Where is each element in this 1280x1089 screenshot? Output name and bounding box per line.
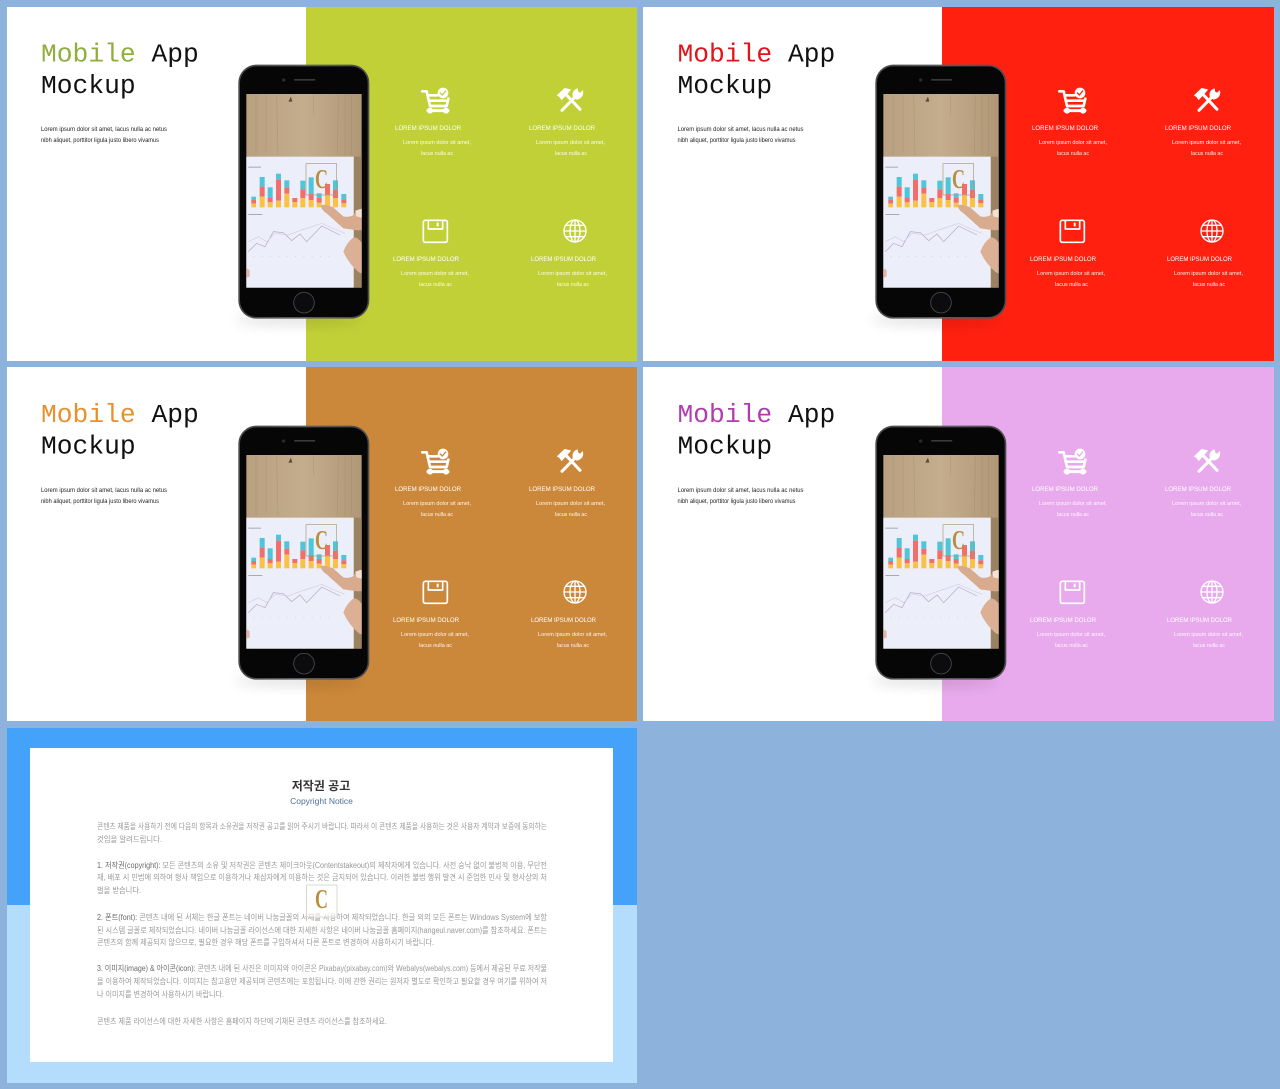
feature: disk text xyxy=(393,617,469,649)
title: Mockup xyxy=(678,432,772,462)
feature: globe text: lacus nulla ac xyxy=(1193,643,1225,649)
text block: introduction xyxy=(97,821,547,844)
body text: Lorem ipsum dolor sit amet, lacus nulla ac netus xyxy=(678,488,804,494)
feature: globe text: LOREM IPSUM DOLOR xyxy=(531,617,597,624)
feature: globe text xyxy=(531,617,607,649)
body text xyxy=(678,127,804,144)
panel: copyright notice xyxy=(7,728,637,1083)
feature: tools text: LOREM IPSUM DOLOR xyxy=(1165,486,1232,493)
feature: cart text xyxy=(395,125,471,157)
icon: floppy disk xyxy=(1060,581,1084,603)
icon: floppy disk xyxy=(1060,220,1084,242)
feature: cart text: lacus nulla ac xyxy=(1057,151,1089,157)
feature: cart text: LOREM IPSUM DOLOR xyxy=(1032,486,1099,493)
feature: disk text: LOREM IPSUM DOLOR xyxy=(1030,256,1097,263)
feature: globe text: Lorem ipsum dolor sit amet, xyxy=(1174,271,1243,277)
text block: images and icons: 나 이미지를 변경하여 사용하시기 바랍니다. xyxy=(97,989,224,999)
feature: tools text: LOREM IPSUM DOLOR xyxy=(529,125,596,132)
text block: images and icons: 을 이용하여 제작되었습니다. 이미지는 참고용만 제공되며 콘텐츠에는 포함됩니다. 이에 관한 권리는 원저자 별도로 확인하고 필요할 경우 여기를 위하여 저 xyxy=(97,976,547,986)
phone mockup xyxy=(234,426,369,686)
body text: nibh aliquet, porttitor ligula justo libero vivamus xyxy=(41,499,159,505)
feature: disk text: lacus nulla ac xyxy=(1055,643,1088,649)
heading: copyright notice: 저작권 공고 xyxy=(292,778,350,793)
feature: tools text xyxy=(1165,486,1241,518)
feature: disk text: Lorem ipsum dolor sit amet, xyxy=(1037,632,1105,638)
feature: tools text: LOREM IPSUM DOLOR xyxy=(529,486,596,493)
feature: cart text: lacus nulla ac xyxy=(1057,512,1089,518)
icon: tools xyxy=(1194,88,1220,110)
feature: tools text: lacus nulla ac xyxy=(555,512,587,518)
phone mockup xyxy=(871,426,1006,686)
phone mockup: C xyxy=(952,525,965,555)
text block: closing line: 콘텐츠 제품 라이선스에 대한 자세한 사항은 홈페이지 하단에 기재된 콘텐츠 라이선스를 참조하세요. xyxy=(97,1016,387,1026)
heading: copyright notice: Copyright Notice xyxy=(290,796,353,806)
feature: tools text: LOREM IPSUM DOLOR xyxy=(1165,125,1232,132)
feature: tools text: Lorem ipsum dolor sit amet, xyxy=(536,501,605,507)
icon: globe xyxy=(564,581,586,603)
title: Mobile App xyxy=(41,40,199,70)
feature: cart text: Lorem ipsum dolor sit amet, xyxy=(403,140,471,146)
title: Mockup xyxy=(678,71,772,101)
phone mockup: C xyxy=(952,164,965,194)
feature: disk text xyxy=(1030,256,1105,288)
feature: disk text: Lorem ipsum dolor sit amet, xyxy=(1037,271,1105,277)
phone mockup: C xyxy=(315,164,328,194)
feature: cart text: Lorem ipsum dolor sit amet, xyxy=(1039,501,1107,507)
title: Mockup xyxy=(41,432,136,462)
feature: globe text: lacus nulla ac xyxy=(557,643,589,649)
icon: tools xyxy=(1194,449,1220,471)
panel: pink mobile app mockup xyxy=(643,367,1274,721)
feature: tools text: Lorem ipsum dolor sit amet, xyxy=(536,140,605,146)
feature: tools text xyxy=(1165,125,1241,157)
icon: globe xyxy=(1201,220,1223,242)
feature: globe text: LOREM IPSUM DOLOR xyxy=(1167,256,1233,263)
feature: globe text: lacus nulla ac xyxy=(557,282,589,288)
text block: copyright xyxy=(97,860,547,895)
icon: floppy disk xyxy=(423,220,447,242)
body text: nibh aliquet, porttitor ligula justo libero vivamus xyxy=(41,138,159,144)
text block: introduction: 콘텐츠 제품을 사용하기 전에 다음의 항목과 소유권을 저작권 공고를 읽어 주시기 바랍니다. 따라서 이 콘텐츠 제품을 사용하는 것은 사용자 계약과 보증에 동의하는 xyxy=(97,821,547,831)
feature: tools text: Lorem ipsum dolor sit amet, xyxy=(1172,140,1241,146)
feature: globe text xyxy=(1167,617,1243,649)
title: Mobile App xyxy=(678,400,835,430)
feature: disk text: lacus nulla ac xyxy=(419,282,452,288)
icon: cart xyxy=(422,88,448,112)
text block: font: 콘텐츠의 함께 제공되지 않으므로, 필요한 경우 해당 폰트를 구입하셔서 다른 폰트로 변경하여 사용하시기 바랍니다. xyxy=(97,937,434,947)
heading: copyright notice xyxy=(290,778,353,806)
body text: Lorem ipsum dolor sit amet, lacus nulla ac netus xyxy=(41,488,167,494)
title: Mockup xyxy=(41,71,136,101)
feature: tools text xyxy=(529,125,605,157)
feature: disk text: LOREM IPSUM DOLOR xyxy=(393,617,460,624)
feature: globe text: Lorem ipsum dolor sit amet, xyxy=(538,271,607,277)
feature: tools text: lacus nulla ac xyxy=(1191,151,1223,157)
feature: tools text: lacus nulla ac xyxy=(555,151,587,157)
phone mockup xyxy=(871,65,1006,325)
feature: globe text: Lorem ipsum dolor sit amet, xyxy=(1174,632,1243,638)
feature: cart text: LOREM IPSUM DOLOR xyxy=(1032,125,1099,132)
panel: orange mobile app mockup xyxy=(7,367,637,721)
icon: cart xyxy=(1059,88,1085,112)
text block: font xyxy=(97,912,548,947)
feature: cart text xyxy=(395,486,471,518)
body text: nibh aliquet, porttitor ligula justo libero vivamus xyxy=(678,138,796,144)
feature: cart text: LOREM IPSUM DOLOR xyxy=(395,486,462,493)
feature: globe text: Lorem ipsum dolor sit amet, xyxy=(538,632,607,638)
feature: disk text: LOREM IPSUM DOLOR xyxy=(1030,617,1097,624)
feature: globe text xyxy=(531,256,607,288)
watermark logo: C xyxy=(315,884,328,914)
title: Mobile App xyxy=(678,40,835,70)
feature: globe text xyxy=(1167,256,1243,288)
icon: cart xyxy=(422,449,448,473)
icon: floppy disk xyxy=(423,581,447,603)
phone mockup: C xyxy=(315,525,328,555)
panel: green mobile app mockup xyxy=(7,7,637,361)
feature: cart text: lacus nulla ac xyxy=(421,512,453,518)
icon: tools xyxy=(557,88,583,110)
body text xyxy=(41,127,167,144)
text block: font: 된 시스템 글꼴로 제작되었습니다. 네이버 나눔글꼴 라이선스에 대한 자세한 사항은 네이버 나눔글꼴 홈페이지(hangeul.naver.com)를 참조하세요. 폰트는 xyxy=(97,925,547,935)
icon: cart xyxy=(1059,449,1085,473)
feature: disk text xyxy=(393,256,469,288)
feature: disk text: lacus nulla ac xyxy=(1055,282,1088,288)
watermark logo xyxy=(306,884,337,917)
body text: Lorem ipsum dolor sit amet, lacus nulla ac netus xyxy=(41,127,167,133)
feature: disk text xyxy=(1030,617,1105,649)
text block: copyright: 1. 저작권(copyright): 모든 콘텐츠의 소유 및 저작권은 콘텐츠 제이크아웃(Contentstakeout)의 제작자에게 있습니다. 사전 승낙 없이 불법적 이용, 무단전 xyxy=(97,860,547,870)
body text: Lorem ipsum dolor sit amet, lacus nulla ac netus xyxy=(678,127,804,133)
feature: tools text: lacus nulla ac xyxy=(1191,512,1223,518)
feature: cart text xyxy=(1032,125,1107,157)
feature: globe text: lacus nulla ac xyxy=(1193,282,1225,288)
icon: globe xyxy=(1201,581,1223,603)
feature: cart text: Lorem ipsum dolor sit amet, xyxy=(1039,140,1107,146)
feature: tools text xyxy=(529,486,605,518)
feature: disk text: LOREM IPSUM DOLOR xyxy=(393,256,460,263)
text block: copyright: 벌을 받습니다. xyxy=(97,885,141,895)
feature: cart text: LOREM IPSUM DOLOR xyxy=(395,125,462,132)
text block: copyright: 재, 배포 시 민법에 의하여 형사 책임으로 이용하거나 제삼자에게 이용하는 것은 금지되어 있습니다. 이러한 불법 행위 발견 시 준엄한 민사 및 형사상의 처 xyxy=(97,872,547,882)
feature: disk text: Lorem ipsum dolor sit amet, xyxy=(401,271,469,277)
body text xyxy=(678,488,804,505)
feature: cart text: lacus nulla ac xyxy=(421,151,453,157)
text block: images and icons: 3. 이미지(image) & 아이콘(icon): 콘텐츠 내에 된 사진은 이미지와 아이콘은 Pixabay(pixabay.com)와 Webalys(webalys.com) 등에서 제공된 무료 저작물 xyxy=(97,963,547,973)
phone mockup xyxy=(234,65,369,325)
title: Mobile App xyxy=(41,400,199,430)
text block: font: 2. 폰트(font): 콘텐츠 내에 된 서체는 한글 폰트는 네이버 나눔글꼴의 서체를 사용하여 제작되었습니다. 한글 외의 모든 폰트는 Windows System에 보함 xyxy=(97,912,548,922)
icon: globe xyxy=(564,220,586,242)
feature: cart text: Lorem ipsum dolor sit amet, xyxy=(403,501,471,507)
feature: globe text: LOREM IPSUM DOLOR xyxy=(531,256,597,263)
text block: introduction: 것임을 알려드립니다. xyxy=(97,834,162,844)
panel: red mobile app mockup xyxy=(643,7,1274,361)
body text xyxy=(41,488,167,505)
feature: disk text: Lorem ipsum dolor sit amet, xyxy=(401,632,469,638)
feature: globe text: LOREM IPSUM DOLOR xyxy=(1167,617,1233,624)
body text: nibh aliquet, porttitor ligula justo libero vivamus xyxy=(678,499,796,505)
text block: images and icons xyxy=(97,963,547,999)
feature: cart text xyxy=(1032,486,1107,518)
feature: disk text: lacus nulla ac xyxy=(419,643,452,649)
icon: tools xyxy=(557,449,583,471)
feature: tools text: Lorem ipsum dolor sit amet, xyxy=(1172,501,1241,507)
